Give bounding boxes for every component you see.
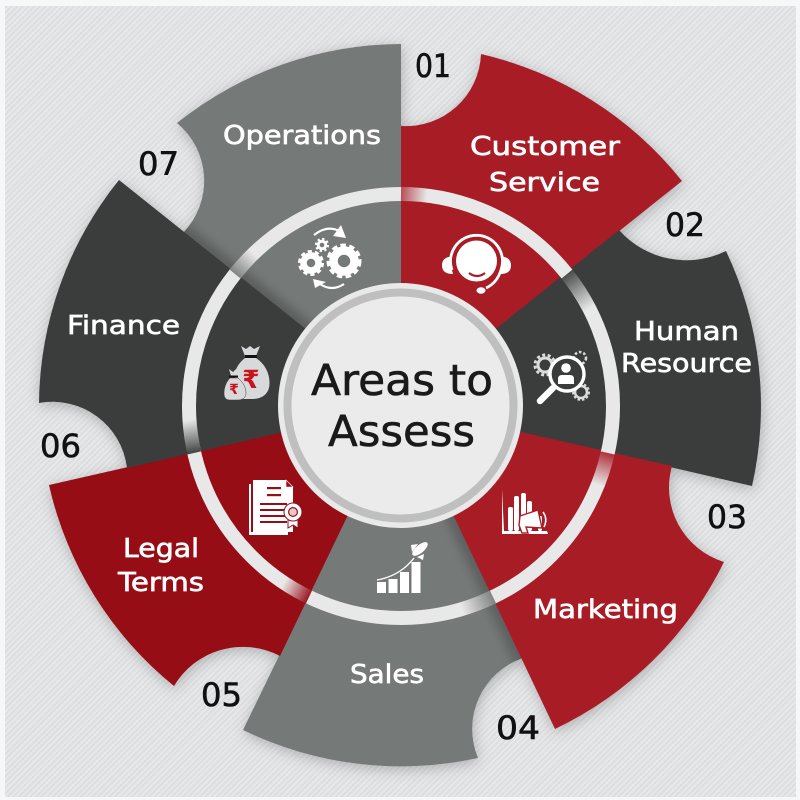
number 05: 05 bbox=[201, 676, 242, 714]
icon: sales bars with rocket bbox=[377, 540, 430, 593]
icon: money bags: ₹ bbox=[229, 382, 239, 398]
label: customer service: Service bbox=[489, 168, 600, 198]
title: Assess bbox=[328, 407, 475, 457]
centre circle bbox=[278, 283, 523, 528]
number 02: 02 bbox=[665, 206, 705, 244]
icon: marketing chart with megaphone bbox=[502, 489, 548, 534]
number 03: 03 bbox=[707, 498, 747, 536]
label: operations: Operations bbox=[223, 121, 381, 151]
icon: money bags: ₹ bbox=[242, 365, 260, 394]
title bbox=[311, 356, 493, 457]
segment: customer service bbox=[401, 54, 682, 405]
number 01: 01 bbox=[415, 47, 451, 85]
icon: headset bbox=[442, 235, 511, 294]
segment: finance bbox=[39, 180, 401, 468]
label: legal terms: Legal bbox=[123, 534, 199, 564]
label: customer service: Customer bbox=[470, 132, 620, 162]
number 06: 06 bbox=[40, 427, 81, 465]
segment: human resource bbox=[401, 230, 761, 486]
segment: sales bbox=[243, 405, 523, 766]
label: human resource: Human bbox=[634, 317, 739, 347]
label: customer service bbox=[470, 132, 620, 198]
icon: gears with arrows bbox=[300, 225, 359, 288]
label: sales: Sales bbox=[350, 660, 424, 690]
label: legal terms bbox=[117, 534, 204, 598]
title: Areas to bbox=[311, 356, 493, 406]
label: marketing: Marketing bbox=[533, 595, 678, 625]
number 04: 04 bbox=[496, 709, 540, 747]
icon: money bags bbox=[224, 346, 270, 400]
label: legal terms: Terms bbox=[117, 568, 204, 598]
segment: marketing bbox=[401, 405, 724, 729]
label: human resource: Resource bbox=[621, 349, 752, 379]
label: finance: Finance bbox=[67, 311, 180, 341]
label: human resource bbox=[621, 317, 752, 379]
light ring with fades at segment boundaries bbox=[189, 194, 613, 618]
segment: operations bbox=[177, 44, 401, 405]
segment: legal terms bbox=[49, 405, 401, 686]
number 07: 07 bbox=[138, 145, 179, 183]
icon: HR magnifier with gears bbox=[535, 352, 589, 401]
icon: legal document with seal bbox=[249, 480, 302, 535]
